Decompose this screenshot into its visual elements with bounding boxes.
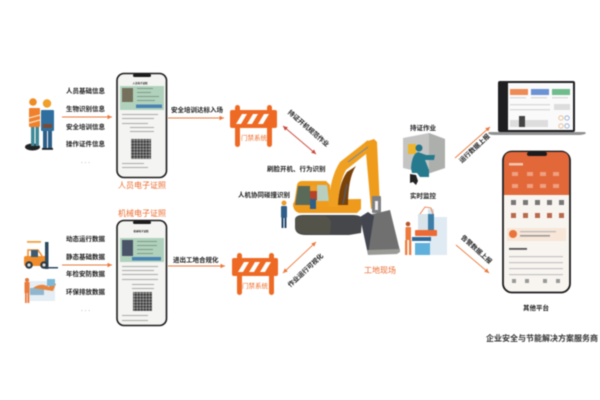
laptop: dashboard [488,81,586,135]
icon: worker at equipment [24,278,56,303]
illustration: excavator [293,139,400,255]
label: run data upload: 运行数据上报 [457,131,492,165]
icon: forklift [24,241,58,269]
arrow: gate 2 to excavator [283,242,316,273]
text block: personnel data: 生物识别信息 [66,104,106,113]
arrow: to gate 1 [168,117,224,119]
text block: machine data: 静态基础数据 [66,252,106,261]
text block: personnel data: 人员基础信息 [66,86,106,95]
icon: small worker [281,200,287,228]
arrow: alarm data [456,245,489,273]
text block: personnel data: 操作证件信息 [66,139,106,148]
icon: gate system 1 [230,105,277,147]
text block: machine data: 动态运行数据 [66,234,106,243]
phone: personnel e-license: 人员电子证照 [132,81,148,85]
text block: machine data: 环保排放数据 [66,287,106,296]
phone: machine e-license [117,220,166,326]
footer slogan: 企业安全与节能解决方案服务商 [486,333,598,343]
arrow: personnel to phone [62,116,112,118]
arrow: machine to phone [62,264,112,266]
phone: platform app [503,152,570,292]
icon: operator with machine [405,207,447,255]
arrow: data up to laptop [455,127,490,158]
label: alarm data upload: 告警数据上报 [459,233,495,266]
label: training arrow: 安全培训达标入场 [171,105,224,114]
heading: personnel e-license: 人员电子证照 [118,180,166,190]
icon: electrician at cabinet [403,133,445,185]
arrow: to gate 2 [168,265,225,267]
phone: personnel e-license [117,74,166,178]
text block: personnel data: 安全培训信息 [66,122,106,131]
text block: personnel data: . . . [81,158,90,165]
icon: gate system 2: 门禁系统 [242,281,268,290]
label: licensed operation: 持证作业 [410,123,436,132]
text block: machine data: . . . [81,306,90,313]
label: visualized operation: 作业运行可视化 [286,251,325,289]
label: compliant operation: 持证开机规范作业 [286,108,332,149]
icon: gate system 1: 门禁系统 [241,133,268,142]
icon: two workers [25,98,54,150]
heading: site: 工地现场 [364,265,396,275]
text block: personnel data [66,86,106,165]
label: realtime monitoring: 实时监控 [410,191,436,200]
icon: gate system 2 [232,253,278,295]
heading: machine e-license: 机械电子证照 [118,208,166,218]
label: collision recognition: 人机协同碰撞识别 [238,190,290,199]
label: face recognition: 刷脸开机、行为识别 [267,164,326,173]
arrow: gate 1 to excavator [283,126,316,154]
phone: machine e-license: 机械电子证照 [133,229,149,233]
label: gate 2 arrow: 进出工地合规化 [173,255,219,264]
label: other platforms: 其他平台 [523,303,550,312]
text block: machine data: 年检安防数据 [66,269,106,278]
text block: machine data [66,234,106,313]
